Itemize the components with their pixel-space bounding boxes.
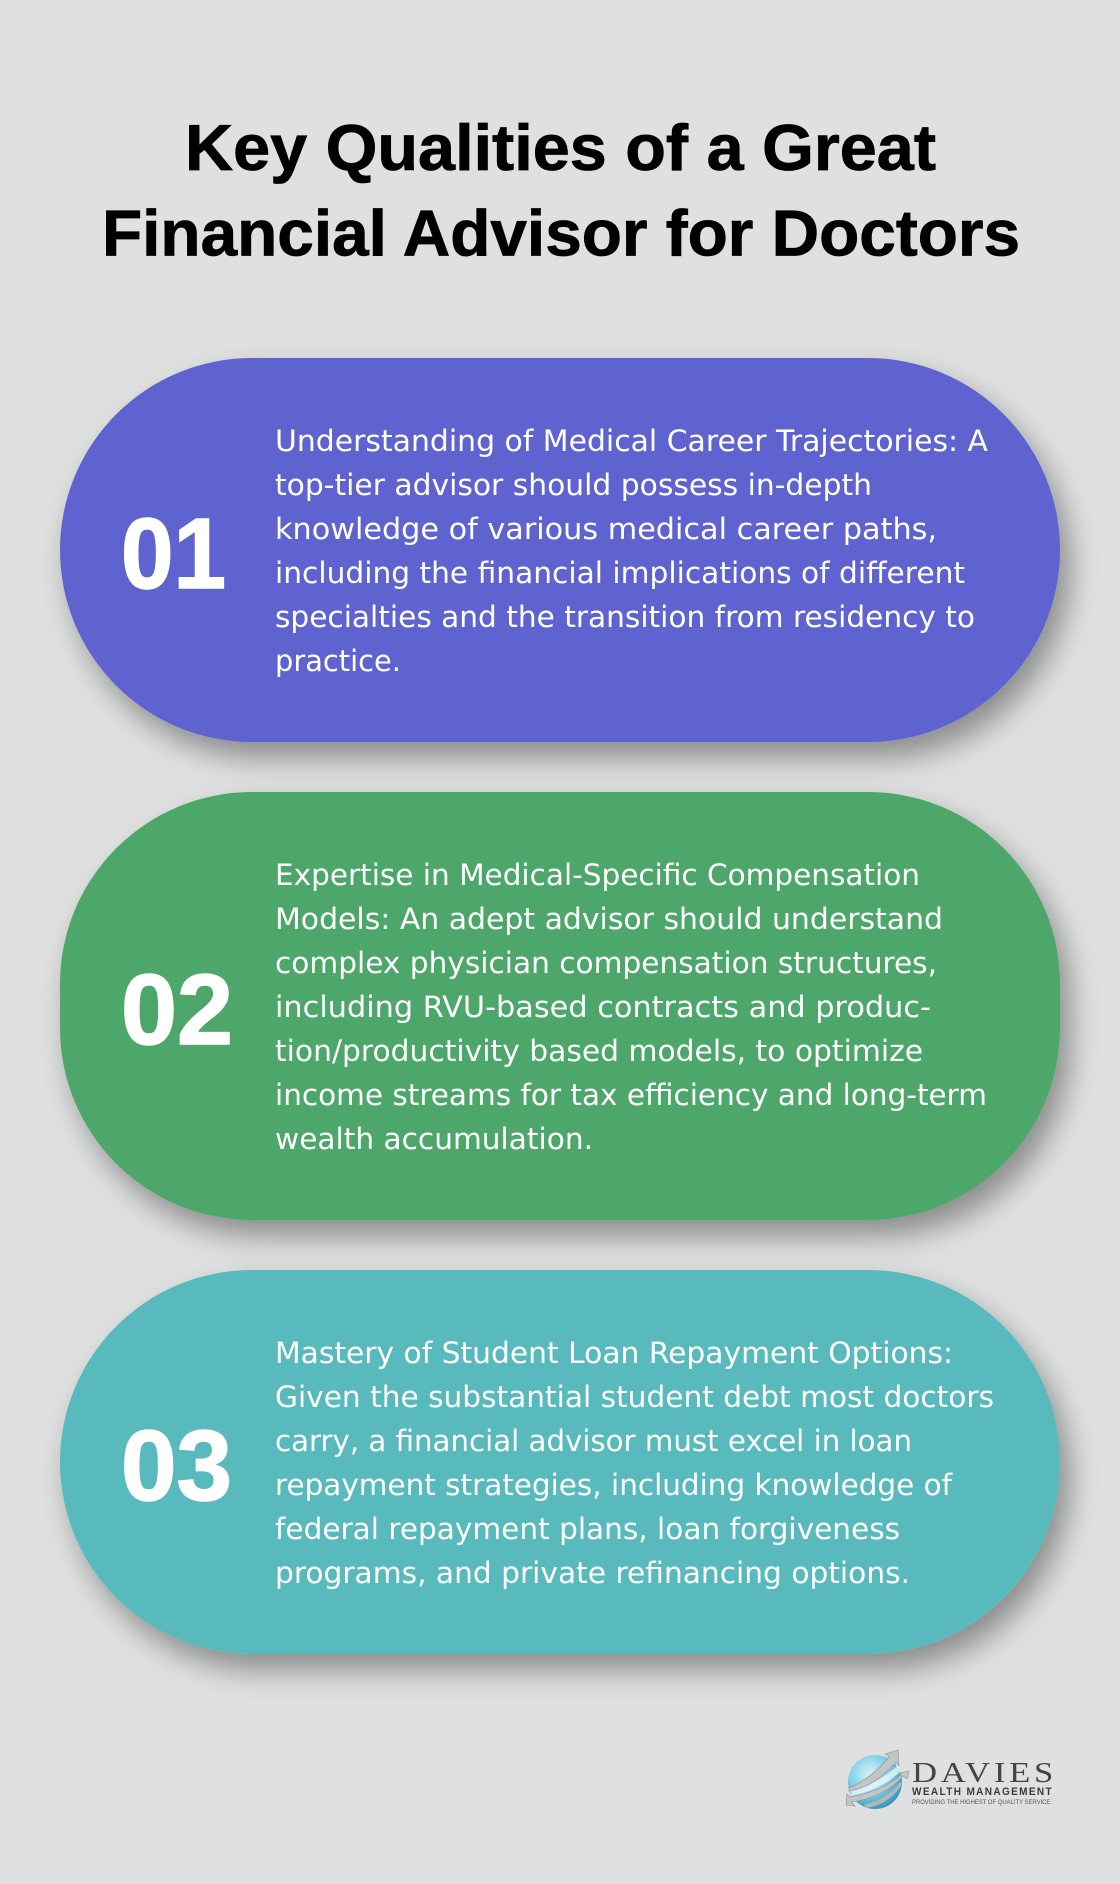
text block: card 02: wealth accumulation. bbox=[275, 1122, 593, 1156]
text block: card 01: including the financial implications of different bbox=[275, 556, 965, 590]
text block: card 03: programs, and private refinancing options. bbox=[275, 1556, 910, 1590]
text block: card 02: Models: An adept advisor should understand bbox=[275, 902, 943, 936]
number 01: 01 bbox=[121, 498, 226, 610]
title bbox=[102, 111, 1020, 270]
text block: card 02 bbox=[275, 858, 987, 1156]
icon: globe with arrows bbox=[846, 1750, 909, 1809]
logo: Davies Wealth Management bbox=[846, 1750, 1057, 1809]
text block: card 01: practice. bbox=[275, 644, 401, 678]
text block: card 02: complex physician compensation structures, bbox=[275, 946, 937, 980]
wordmark: DAVIES bbox=[912, 1758, 1057, 1789]
text block: card 02: income streams for tax efficiency and long-term bbox=[275, 1078, 987, 1112]
title: Financial Advisor for Doctors bbox=[102, 196, 1020, 270]
text block: card 01: knowledge of various medical career paths, bbox=[275, 512, 937, 546]
number 02: 02 bbox=[121, 954, 233, 1066]
title: Key Qualities of a Great bbox=[185, 111, 936, 184]
tagline: PROVIDING THE HIGHEST OF QUALITY SERVICE. bbox=[912, 1799, 1052, 1806]
text block: card 03: carry, a financial advisor must excel in loan bbox=[275, 1424, 912, 1458]
text block: card 03: federal repayment plans, loan forgiveness bbox=[275, 1512, 900, 1546]
text block: card 03: Given the substantial student debt most doctors bbox=[275, 1380, 994, 1414]
number 03: 03 bbox=[121, 1410, 232, 1522]
text block: card 02: tion/productivity based models, to optimize bbox=[275, 1034, 923, 1068]
panel: card 03 bbox=[60, 1270, 1060, 1654]
text block: card 01: Understanding of Medical Career Trajectories: A bbox=[275, 424, 988, 458]
wordmark subtitle: WEALTH MANAGEMENT bbox=[912, 1786, 1053, 1798]
text block: card 01: specialties and the transition from residency to bbox=[275, 600, 975, 634]
text block: card 02: including RVU-based contracts and produc- bbox=[275, 990, 931, 1024]
text block: card 03: repayment strategies, including knowledge of bbox=[275, 1468, 953, 1502]
panel: card 01 bbox=[60, 358, 1060, 742]
text block: card 03 bbox=[275, 1336, 994, 1590]
text block: card 01: top-tier advisor should possess in-depth bbox=[275, 468, 872, 502]
panel: card 02 bbox=[60, 792, 1060, 1220]
text block: card 03: Mastery of Student Loan Repayment Options: bbox=[275, 1336, 953, 1370]
text block: card 02: Expertise in Medical-Specific Compensation bbox=[275, 858, 920, 892]
text block: card 01 bbox=[275, 424, 988, 678]
